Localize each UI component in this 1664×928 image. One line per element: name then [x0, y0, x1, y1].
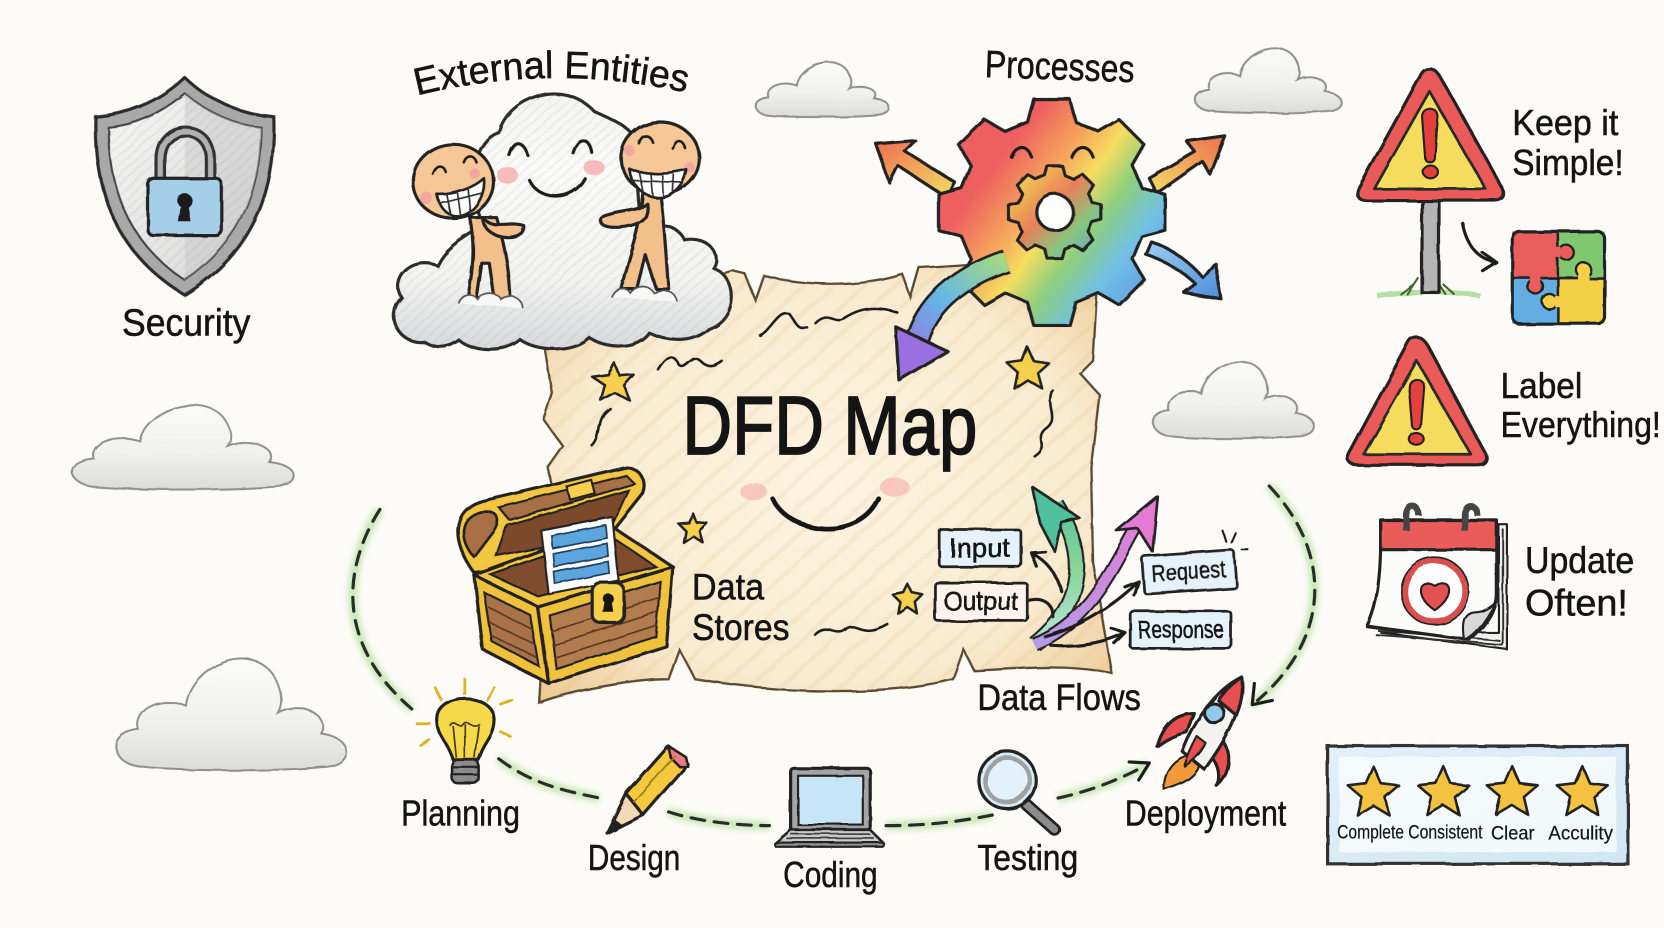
icon: laptop	[775, 768, 884, 847]
rating labels: Consistent	[1408, 822, 1483, 843]
icon: pencil	[607, 746, 688, 833]
decorative cloud top centre	[755, 62, 889, 117]
label: Data Stores: Data	[692, 566, 764, 608]
rating labels: Complete	[1337, 822, 1404, 843]
map stars	[592, 347, 1048, 613]
icon: warning sign with post	[1357, 69, 1504, 296]
label box: Input	[939, 530, 1021, 567]
tip: Label Everything: Label	[1501, 365, 1582, 406]
rating labels	[1337, 822, 1613, 844]
chest right face	[538, 567, 673, 683]
decorative cloud middle left	[72, 405, 294, 489]
rating labels: Acculity	[1548, 823, 1613, 844]
icon: rocket	[1157, 677, 1242, 790]
heading: Processes: Processes	[984, 43, 1135, 91]
label box: Output: Output	[943, 586, 1018, 616]
document in chest	[541, 517, 619, 594]
title: DFD Map	[682, 379, 977, 472]
left person	[413, 144, 524, 308]
arrow: up left from gear	[876, 140, 955, 197]
arrow: rainbow curve to parchment	[896, 261, 1006, 380]
chest interior	[474, 525, 673, 607]
label box: Input: Input	[949, 533, 1011, 563]
decorative cloud top right	[1195, 48, 1341, 113]
icon: security shield	[95, 77, 274, 295]
label: Deployment: Deployment	[1125, 793, 1286, 834]
arrow: down right from gear	[1146, 242, 1221, 299]
chest lock	[592, 583, 624, 623]
tip: Update Often: Update	[1525, 539, 1634, 581]
map face	[740, 478, 909, 529]
chest left face	[474, 575, 549, 683]
heading: External Entities: External Entities	[414, 50, 688, 95]
label: Planning: Planning	[401, 793, 520, 834]
icon: calendar	[1367, 506, 1507, 649]
icon: warning triangle	[1348, 337, 1487, 465]
label: Design: Design	[588, 837, 680, 878]
icon: rainbow gear	[938, 99, 1165, 325]
label box: Response	[1130, 611, 1231, 648]
label box: Request: Request	[1151, 556, 1227, 588]
tip: Update Often: Often!	[1525, 582, 1628, 624]
tip: Keep it Simple: Keep it	[1512, 102, 1618, 143]
label: Testing: Testing	[977, 837, 1078, 878]
rating labels: Clear	[1491, 823, 1535, 844]
chest lid	[458, 467, 645, 573]
panel: parchment map	[539, 261, 1112, 703]
tip: Keep it Simple: Simple!	[1512, 142, 1624, 183]
icon: light bulb	[417, 679, 513, 783]
label box: Response: Response	[1138, 617, 1225, 644]
icon: treasure chest	[458, 467, 673, 683]
label box: Output	[935, 583, 1027, 621]
label: Data Flows: Data Flows	[977, 676, 1141, 718]
icon: puzzle	[1512, 231, 1605, 324]
flow arrows	[1027, 487, 1248, 646]
label: Coding: Coding	[783, 854, 878, 895]
decorative cloud lower left	[116, 659, 347, 770]
map squiggles	[592, 308, 1053, 635]
icon: smiling cloud with two external entities	[393, 93, 732, 349]
decorative cloud middle right	[1153, 362, 1313, 438]
right person	[600, 122, 699, 301]
label: Data Stores: Stores	[692, 606, 790, 648]
development timeline dashed paths	[353, 486, 1315, 826]
icon: magnifier	[978, 751, 1055, 830]
label box: Request	[1142, 550, 1236, 594]
heading: Security: Security	[122, 301, 251, 344]
arrow: up right from gear	[1149, 136, 1225, 193]
panel: quality ratings	[1328, 746, 1628, 864]
arrow: sign to puzzle	[1462, 223, 1496, 271]
